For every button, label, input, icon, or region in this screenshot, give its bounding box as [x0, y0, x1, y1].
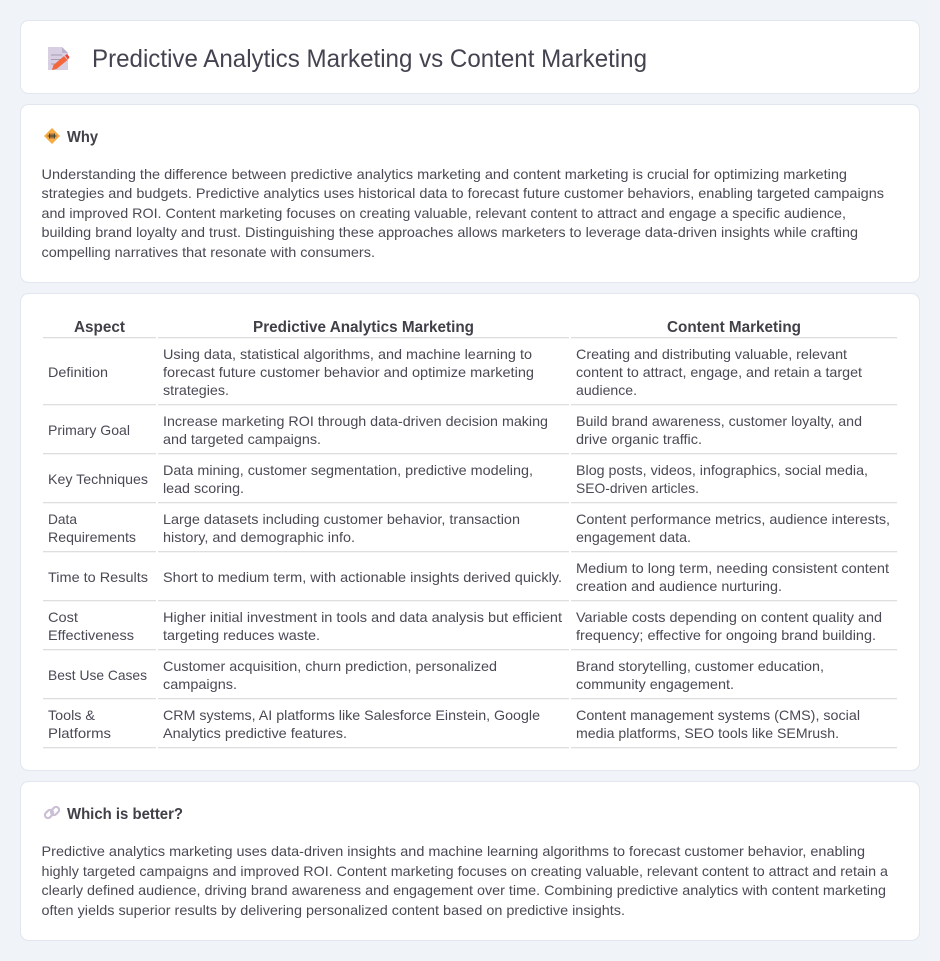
table header: Predictive Analytics Marketing	[253, 319, 474, 336]
row: best use cases: campaigns.	[163, 676, 237, 692]
row: cost effectiveness: Variable costs depending on content quality and	[576, 609, 882, 625]
row: data requirements	[48, 511, 890, 545]
row: definition: audience.	[576, 382, 637, 398]
row: definition: Using data, statistical algorithms, and machine learning to	[163, 346, 532, 362]
row: primary goal: Primary Goal	[48, 422, 130, 438]
table header: Content Marketing	[667, 319, 801, 336]
row: data requirements: engagement data.	[576, 529, 691, 545]
row: best use cases: Customer acquisition, churn prediction, personalized	[163, 658, 497, 674]
text block: why paragraph: building brand loyalty and trust. Distinguishing these approaches allows marketers to leverage data-driven insights while crafting	[42, 224, 858, 240]
row: tools and platforms: Platforms	[48, 725, 111, 741]
text block: why paragraph: and improved ROI. Content marketing focuses on creating valuable, relevant content to attract and engage a specific audience,	[42, 205, 846, 221]
row: time to results: Medium to long term, needing consistent content	[576, 560, 889, 576]
row: primary goal: Increase marketing ROI through data-driven decision making	[163, 413, 548, 429]
row: time to results: Short to medium term, with actionable insights derived quickly.	[163, 569, 562, 585]
row: data requirements: Data	[48, 511, 77, 527]
table header: Aspect	[74, 319, 126, 336]
text block: which is better paragraph: clearly defined audience, driving brand awareness and engagement over time. Combining predictive analytics with content marketing	[42, 882, 886, 898]
panel: why	[20, 104, 920, 282]
text block: which is better paragraph	[42, 843, 888, 918]
row: data requirements: Content performance metrics, audience interests,	[576, 511, 890, 527]
icon: link	[44, 806, 60, 819]
row: definition: Definition	[48, 364, 108, 380]
row: definition	[48, 346, 862, 398]
row: tools and platforms: Content management systems (CMS), social	[576, 707, 860, 723]
row: definition: Creating and distributing valuable, relevant	[576, 346, 847, 362]
text block: why paragraph: Understanding the difference between predictive analytics marketing and content marketing is crucial for optimizing marketing	[42, 166, 847, 182]
title: Predictive Analytics Marketing vs Content Marketing	[92, 45, 647, 73]
row: key techniques: Data mining, customer segmentation, predictive modeling,	[163, 462, 533, 478]
table header	[74, 319, 801, 336]
row: data requirements: Large datasets including customer behavior, transaction	[163, 511, 520, 527]
heading: which is better: Which is better?	[67, 806, 183, 823]
row: tools and platforms	[48, 707, 860, 741]
row: key techniques: SEO-driven articles.	[576, 480, 699, 496]
row: cost effectiveness	[48, 609, 882, 643]
row: best use cases: Brand storytelling, customer education,	[576, 658, 824, 674]
row: tools and platforms: Tools &	[48, 707, 96, 723]
row: cost effectiveness: Effectiveness	[48, 627, 134, 643]
panel: comparison table	[20, 294, 920, 770]
icon: warning diamond	[44, 128, 60, 144]
row: cost effectiveness: Higher initial investment in tools and data analysis but efficient	[163, 609, 562, 625]
row: definition: content to attract, engage, and retain a target	[576, 364, 862, 380]
row: key techniques: Key Techniques	[48, 471, 148, 487]
text block: which is better paragraph: often yields superior results by delivering personalized content based on predictive insights.	[42, 902, 625, 918]
row: primary goal: drive organic traffic.	[576, 431, 702, 447]
row: tools and platforms: Analytics predictive features.	[163, 725, 347, 741]
row: definition: forecast future customer behavior and optimize marketing	[163, 364, 534, 380]
text block: why paragraph	[42, 166, 884, 260]
row: best use cases: community engagement.	[576, 676, 734, 692]
row: primary goal: and targeted campaigns.	[163, 431, 321, 447]
icon: document with pencil	[48, 47, 70, 70]
row: definition: strategies.	[163, 382, 229, 398]
row: best use cases: Best Use Cases	[48, 667, 147, 683]
row: time to results	[48, 560, 889, 594]
row: tools and platforms: media platforms, SEO tools like SEMrush.	[576, 725, 839, 741]
heading: why: Why	[67, 129, 98, 146]
row: cost effectiveness: Cost	[48, 609, 78, 625]
text block: why paragraph: strategies and budgets. Predictive analytics uses historical data to forecast future customer behaviors, enabling targeted campaigns	[42, 185, 884, 201]
row: best use cases	[48, 658, 824, 692]
row: primary goal	[48, 413, 862, 447]
panel: which is better	[20, 782, 920, 940]
row: cost effectiveness: frequency; effective for ongoing brand building.	[576, 627, 876, 643]
row: tools and platforms: CRM systems, AI platforms like Salesforce Einstein, Google	[163, 707, 540, 723]
row: data requirements: history, and demographic info.	[163, 529, 355, 545]
row: key techniques: lead scoring.	[163, 480, 244, 496]
row: key techniques	[48, 462, 868, 496]
row: data requirements: Requirements	[48, 529, 136, 545]
row: time to results: creation and audience nurturing.	[576, 578, 782, 594]
text block: why paragraph: compelling narratives that resonate with consumers.	[42, 244, 375, 260]
text block: which is better paragraph: Predictive analytics marketing uses data-driven insights and machine learning algorithms to forecast customer behavior, enabling	[42, 843, 865, 859]
row: time to results: Time to Results	[48, 569, 148, 585]
panel: title header	[20, 20, 920, 94]
text block: which is better paragraph: highly targeted campaigns and improved ROI. Content marketing focuses on creating valuable, relevant content to attract and retain a	[42, 863, 888, 879]
row: primary goal: Build brand awareness, customer loyalty, and	[576, 413, 862, 429]
row: cost effectiveness: targeting reduces waste.	[163, 627, 320, 643]
row: key techniques: Blog posts, videos, infographics, social media,	[576, 462, 868, 478]
